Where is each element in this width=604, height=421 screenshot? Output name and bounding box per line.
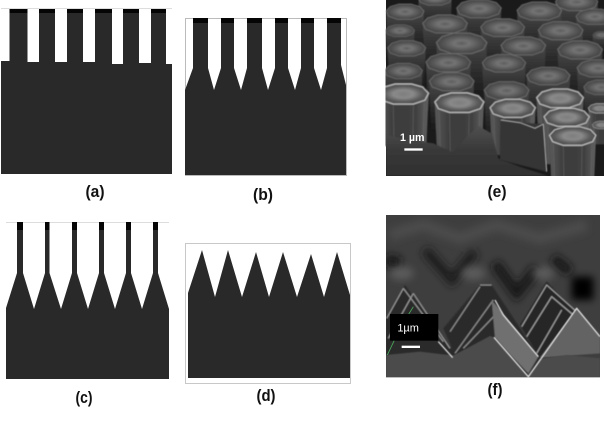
label (f): (f) [488,380,502,399]
panel (d): finished pyramids [186,244,350,384]
label (b): (b) [253,185,273,204]
green artefact [387,307,413,355]
panel (e): SEM micrograph of pillars [378,0,604,184]
pyramids and substrate [188,250,350,378]
foreground ground [386,336,600,377]
mask caps [17,222,158,230]
mid-ground pyramids [386,282,600,375]
panel (f): SEM micrograph of pyramids [386,215,600,377]
bright ridge edges [438,300,600,377]
label (e): (e) [488,182,506,201]
broken pillar [500,120,547,172]
pillar field [378,0,604,164]
front pillar [549,127,596,184]
panel (c): thin stems on pyramids [6,222,169,379]
scale bar [404,148,423,151]
mask caps [10,9,166,13]
blurred background chevrons [386,225,593,293]
panel (b): pillars with short sharpened bases [185,18,346,176]
mask caps [193,18,341,23]
panel (a): rectangular pillars [1,8,172,174]
pillars and substrate [1,9,172,174]
scale bar [402,346,420,348]
label (c): (c) [76,388,92,407]
etched ground with mound [386,126,548,176]
hazy peaks [390,267,554,280]
label (a): (a) [86,182,104,201]
scale bar label: 1 µm [400,132,425,144]
broken pillar rim [501,120,547,172]
label (d): (d) [256,386,276,405]
scale box [390,314,438,341]
scale label: 1µm [397,323,419,335]
pillars and substrate [185,18,346,175]
stems and substrate [6,222,169,379]
